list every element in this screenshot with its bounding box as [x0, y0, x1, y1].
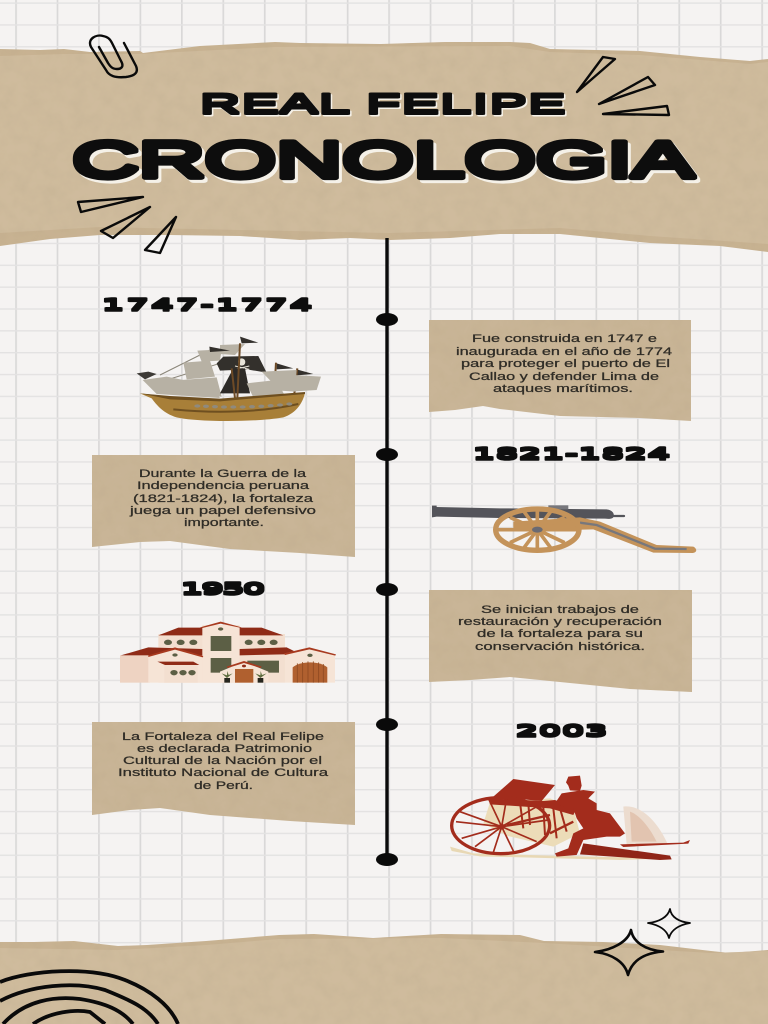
icon: burst lines left: [78, 197, 176, 253]
panel: text patrimonio: es declarada Patrimonio: [137, 743, 312, 755]
icon: concentric arcs: [0, 971, 178, 1024]
icon: small sparkle: [648, 909, 690, 938]
title: cronologia: CRONOLOGIA: [72, 132, 694, 188]
title: real felipe: REAL FELIPE: [200, 90, 565, 119]
title: real felipe: REAL FELIPE: [202, 91, 567, 121]
panel: text patrimonio: Cultural de la Nación por el: [123, 755, 322, 767]
panel: text 1747: Fue construida en 1747 e: [472, 333, 657, 345]
panel: torn paper footer: [0, 934, 768, 1024]
panel: text patrimonio: Instituto Nacional de Cultura: [118, 767, 328, 779]
icon: paperclip: [90, 36, 137, 77]
panel: text 1747: Callao y defender Lima de: [469, 371, 659, 383]
panel: text 1747: para proteger el puerto de El: [461, 358, 670, 370]
panel: text restauracion: de la fortaleza para su: [477, 628, 643, 640]
panel: text restauracion: conservación histórica.: [475, 641, 645, 653]
panel: text patrimonio: La Fortaleza del Real Felipe: [122, 731, 324, 743]
year: 1950: 1950: [181, 580, 265, 598]
icon: colonial house: [120, 622, 336, 683]
icon: large sparkle: [595, 930, 663, 975]
panel: text restauracion: [429, 590, 692, 692]
icon: gun carriage with soldier: [450, 776, 690, 860]
panel: text independencia: Independencia peruana: [137, 480, 309, 492]
panel: text independencia: Durante la Guerra de la: [139, 468, 306, 480]
panel: text 1747: inaugurada en el año de 1774: [456, 346, 672, 358]
panel: torn paper header: [0, 42, 768, 252]
panel: text restauracion: Se inician trabajos de: [481, 604, 639, 616]
year: 2003: 2003: [516, 722, 607, 740]
panel: text restauracion: restauración y recuperación: [458, 616, 662, 628]
panel: text independencia: importante.: [184, 517, 264, 529]
panel: text 1747: [429, 320, 691, 421]
panel: text independencia: [92, 455, 355, 557]
panel: text patrimonio: de Perú.: [194, 780, 253, 792]
title: cronologia: CRONOLOGIA: [75, 135, 697, 191]
timeline axis with dots: [376, 238, 398, 866]
panel: text 1747: ataques marítimos.: [493, 383, 633, 395]
panel: text patrimonio: [92, 722, 355, 825]
year: 1821-1824: 1821-1824: [473, 445, 670, 463]
panel: text independencia: (1821-1824), la fortaleza: [133, 493, 313, 505]
panel: text independencia: juega un papel defensivo: [128, 505, 316, 517]
year: 1747-1774: 1747-1774: [102, 296, 312, 314]
icon: cannon: [432, 505, 696, 553]
icon: pirate ship: [137, 337, 321, 421]
icon: burst lines right: [577, 57, 669, 115]
